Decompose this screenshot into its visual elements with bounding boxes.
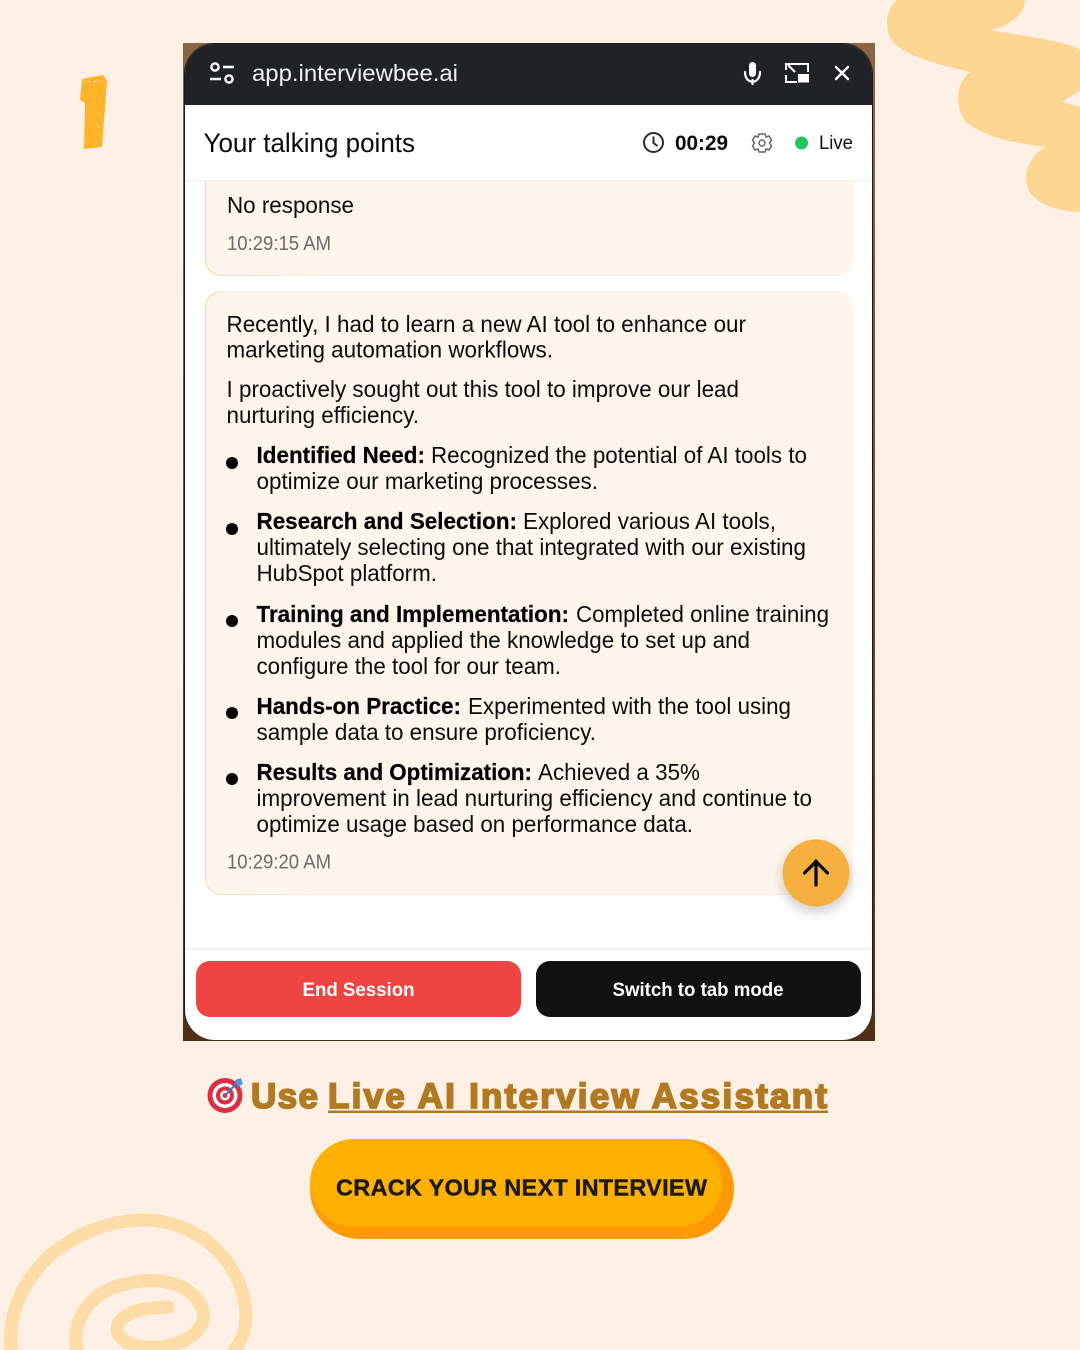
bullet: identified need: Recognized the potential of AI tools to [431, 442, 807, 468]
end session button: End Session [302, 980, 414, 1001]
live indicator: Live [819, 132, 853, 154]
talking points bar [185, 132, 872, 182]
switch to tab mode button [536, 961, 861, 1017]
bullet: results and optimization: improvement in lead nurturing efficiency and continue to [256, 785, 812, 811]
icon: close [836, 67, 848, 79]
bullet: results and optimization: Results and Optimization: [256, 759, 532, 785]
decorative spiral: bottom left [11, 1220, 246, 1350]
scroll to top button [782, 840, 850, 906]
bullet: identified need [226, 442, 807, 494]
call to action heading: Live AI Interview Assistant [328, 1077, 827, 1116]
icon: sliders [210, 63, 234, 83]
bullet: results and optimization: optimize usage based on performance data. [256, 811, 693, 837]
icon: settings gear [752, 134, 772, 152]
call to action button [310, 1139, 734, 1239]
header bar [185, 44, 872, 105]
message card: no response [205, 181, 853, 276]
second paragraph: I proactively sought out this tool to improve our lead [226, 376, 739, 402]
bullet: research and selection: Explored various AI tools, [523, 508, 776, 534]
url: app.interviewbee.ai [252, 60, 458, 86]
bullet: hands-on practice: Experimented with the tool using [468, 693, 791, 719]
live indicator [795, 135, 852, 150]
bullet: research and selection: ultimately selecting one that integrated with our existing [256, 534, 806, 560]
switch to tab mode button: Switch to tab mode [612, 980, 784, 1001]
message card: answer [205, 291, 853, 895]
intro paragraph: marketing automation workflows. [226, 336, 553, 362]
app window screenshot [183, 43, 875, 1041]
decorative blob: top right [887, 0, 1080, 212]
bullet: research and selection [226, 508, 806, 586]
icon: target with dart [208, 1078, 243, 1113]
bullet: training and implementation: Training and Implementation: [256, 601, 569, 627]
bullet: training and implementation [226, 601, 829, 679]
bullet: hands-on practice [226, 693, 791, 745]
footer divider [185, 948, 872, 950]
second paragraph: nurturing efficiency. [226, 402, 419, 428]
intro paragraph: Recently, I had to learn a new AI tool to enhance our [226, 311, 746, 337]
call to action button: CRACK YOUR NEXT INTERVIEW [336, 1174, 708, 1200]
icon: microphone [745, 62, 760, 84]
bullet: training and implementation: modules and applied the knowledge to set up and [256, 627, 750, 653]
bullet: hands-on practice: Hands-on Practice: [256, 693, 461, 719]
icon: picture in picture [786, 64, 809, 82]
bullet: results and optimization: Achieved a 35% [538, 759, 700, 785]
bullet: training and implementation: Completed online training [576, 601, 829, 627]
second paragraph [226, 376, 739, 428]
window frame backing [183, 43, 875, 1041]
call to action heading: Use [251, 1077, 318, 1116]
bullet: identified need: Identified Need: [256, 442, 425, 468]
bullet: identified need: optimize our marketing processes. [256, 468, 598, 494]
bullet: research and selection: HubSpot platform. [256, 560, 437, 586]
intro paragraph [226, 311, 746, 362]
end session button [196, 961, 521, 1017]
icon: clock [644, 133, 663, 152]
timer: 00:29 [675, 132, 728, 155]
bullet: results and optimization [226, 759, 812, 837]
bullet: research and selection: Research and Selection: [256, 508, 517, 534]
step number 1 [80, 75, 107, 149]
bullet: hands-on practice: sample data to ensure proficiency. [256, 719, 596, 745]
message card: no response: 10:29:15 AM [227, 233, 331, 255]
message card: no response: No response [227, 192, 354, 218]
timestamp: 10:29:20 AM [227, 852, 331, 874]
heading: Your talking points [204, 128, 415, 158]
bullet: training and implementation: configure the tool for our team. [256, 653, 561, 679]
